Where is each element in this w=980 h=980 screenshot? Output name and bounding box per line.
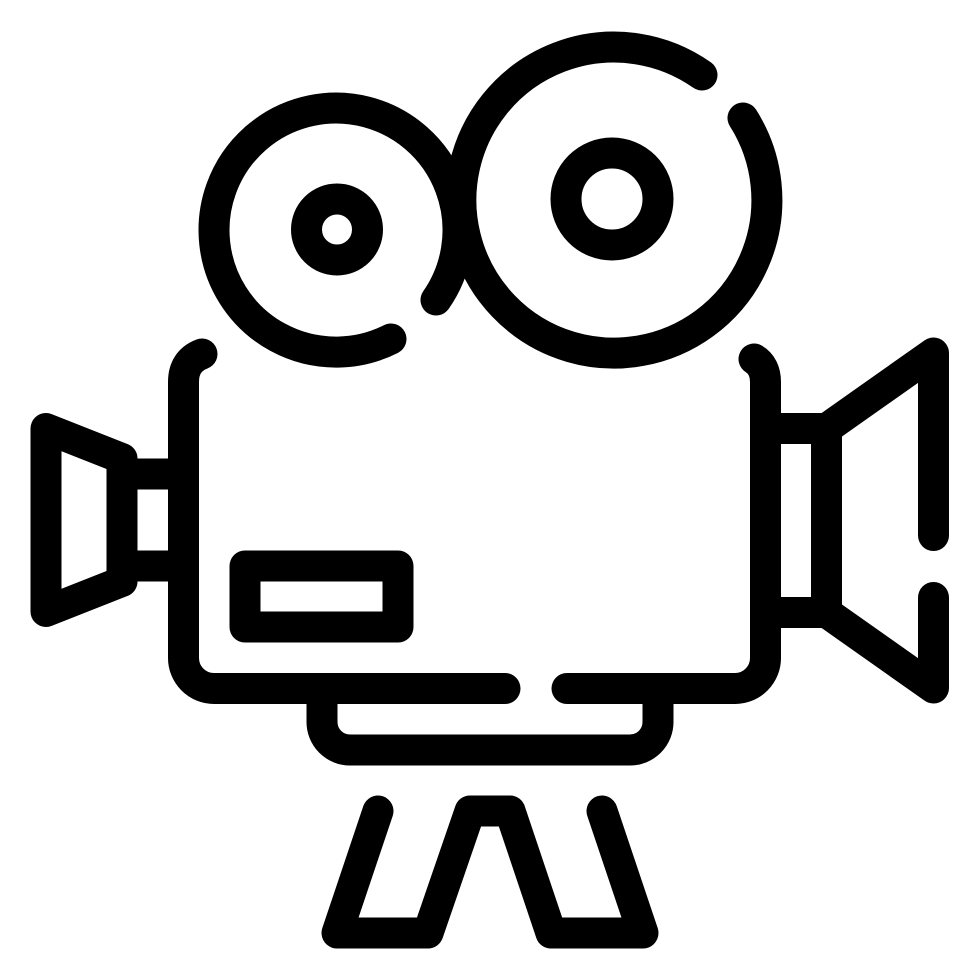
large film reel, right [461, 47, 767, 353]
tripod legs [337, 811, 643, 933]
right lens [766, 353, 934, 688]
camera body [184, 354, 766, 688]
camera base [322, 688, 658, 750]
left lens [46, 428, 184, 612]
label plate on camera body [245, 566, 398, 627]
small film reel, left [214, 108, 458, 352]
